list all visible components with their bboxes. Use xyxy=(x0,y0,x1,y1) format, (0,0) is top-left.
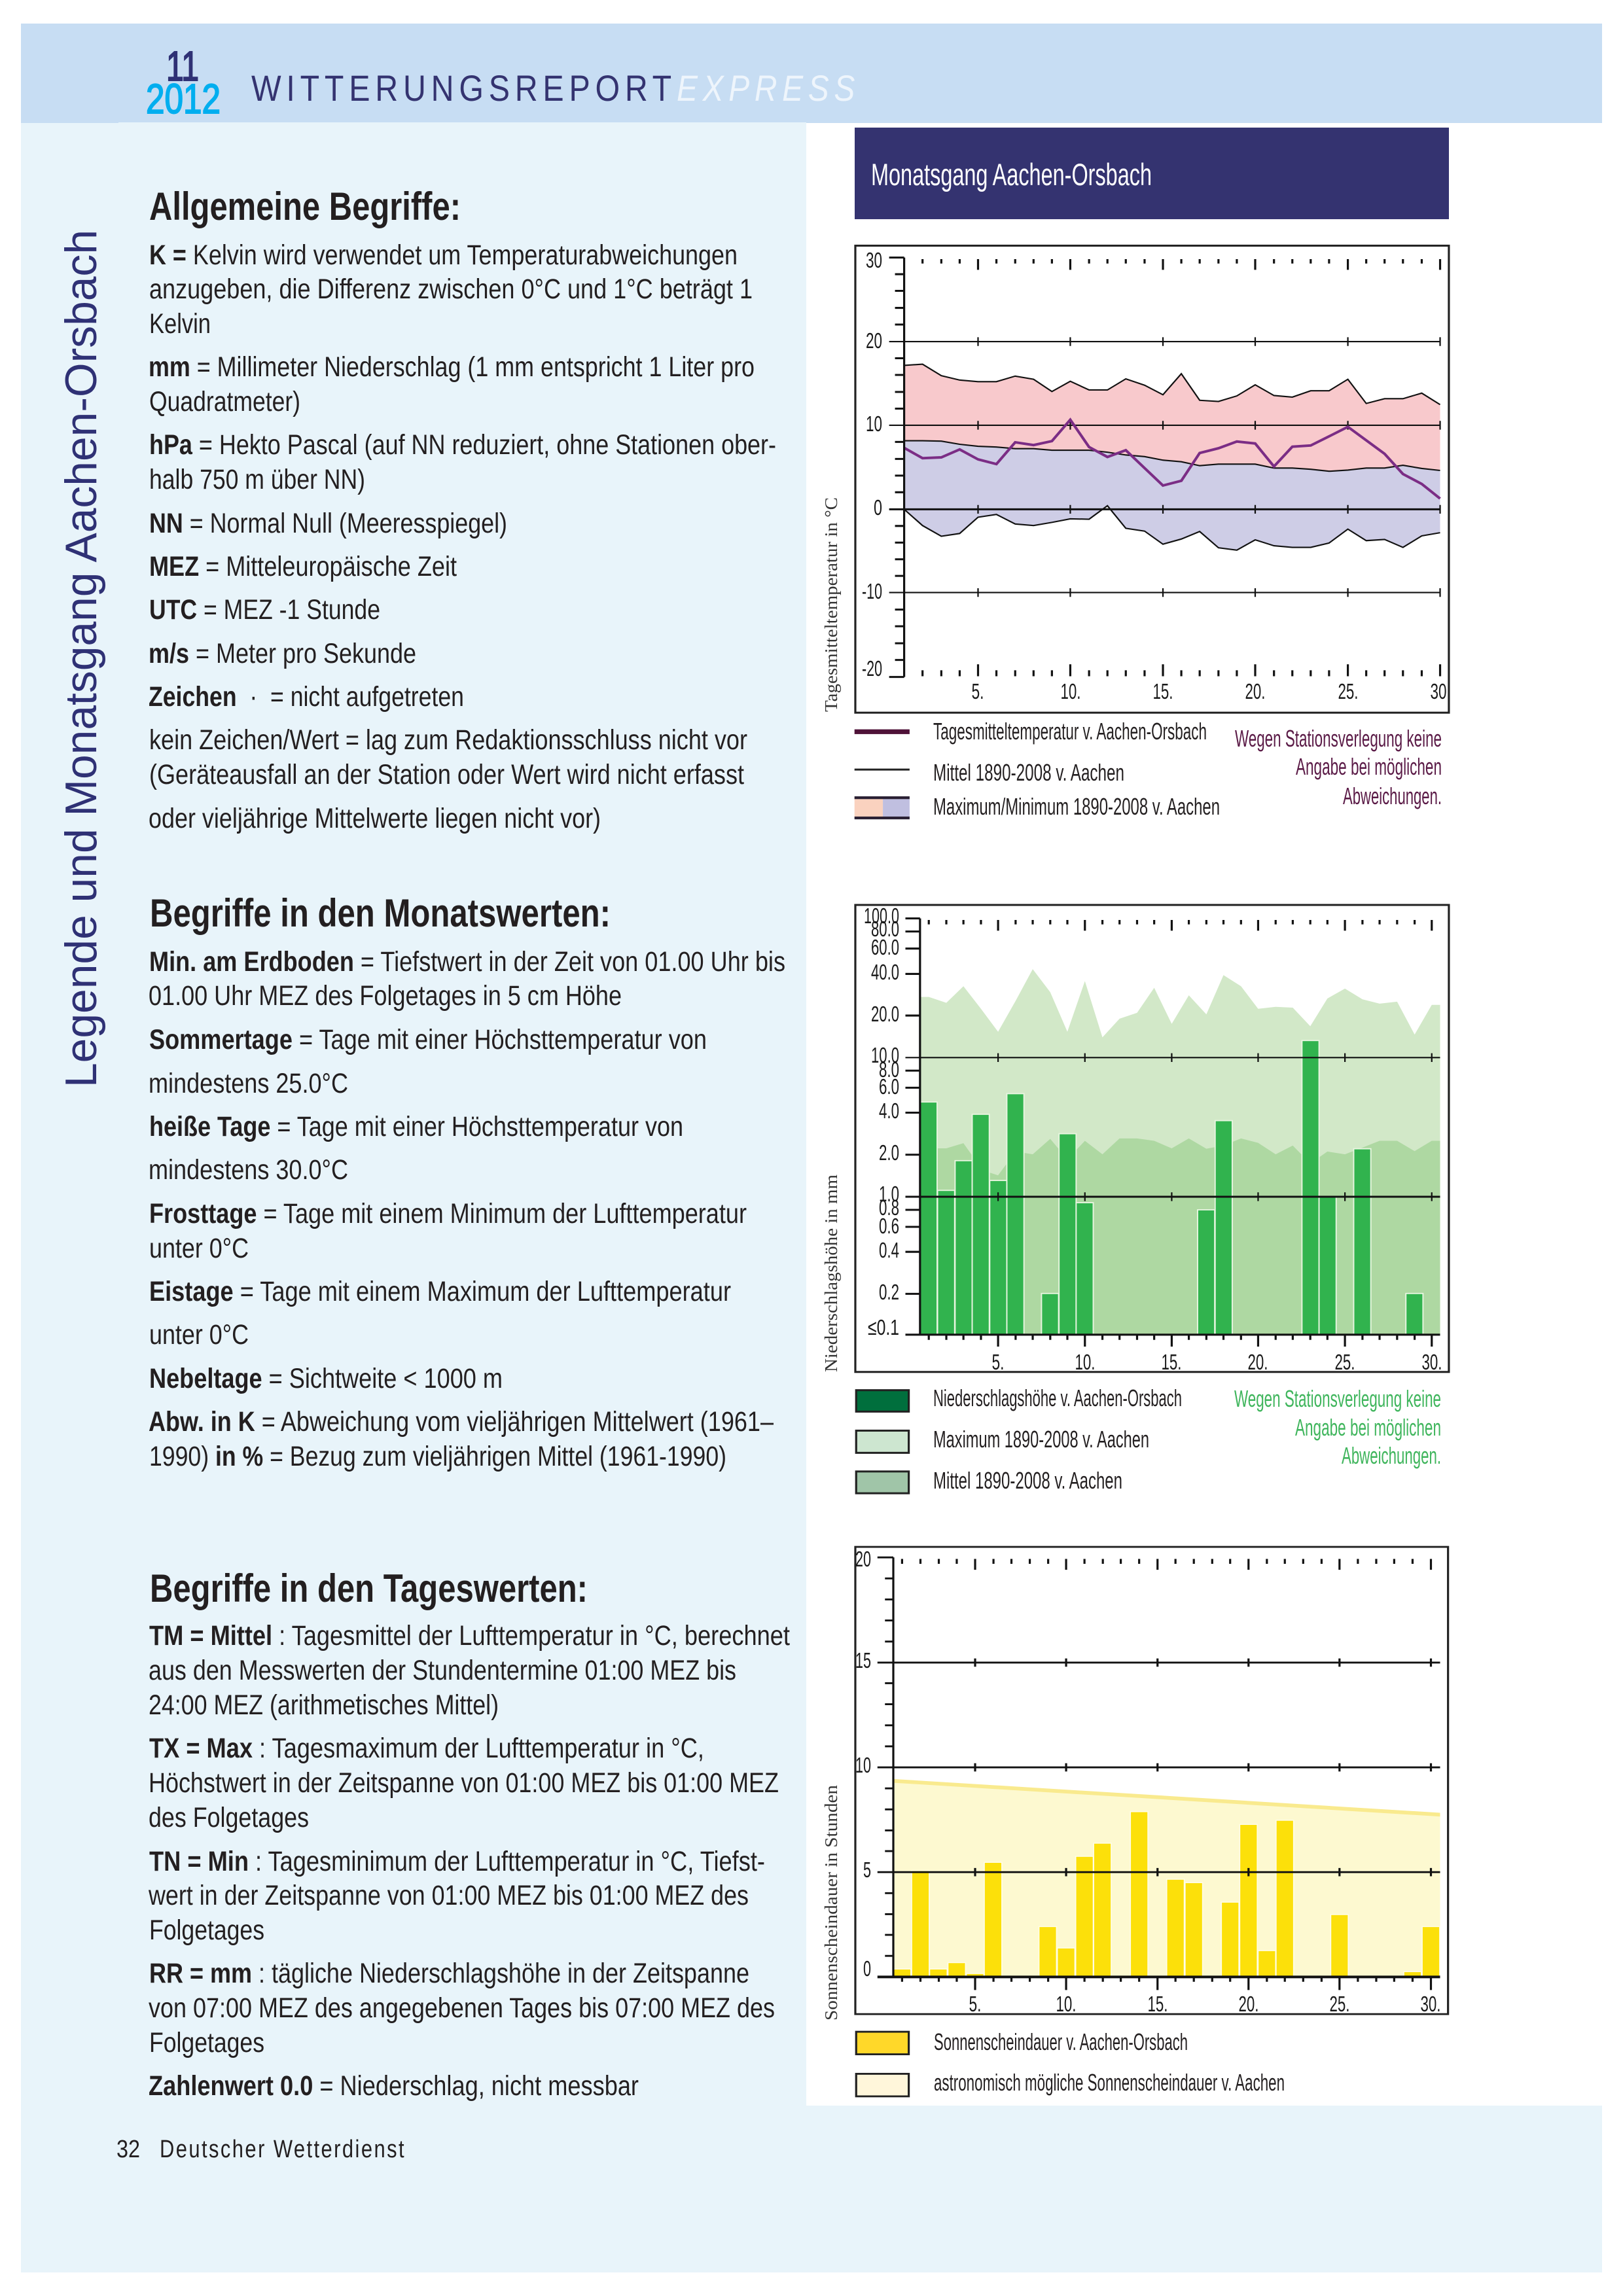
precipitation y-axis labels: 0.2 xyxy=(879,1280,899,1304)
definition Min. am Erdboden xyxy=(149,946,785,1012)
axes and ticks xyxy=(889,258,1440,677)
definition Frosttage xyxy=(149,1198,747,1264)
precipitation y-axis labels: 0.6 xyxy=(879,1214,899,1238)
temperature x-axis labels: 30 xyxy=(1431,679,1446,703)
sunshine axis title: Sonnenscheindauer in Stunden xyxy=(821,1784,841,2021)
definition Eistage xyxy=(149,1276,731,1351)
definition Nebeltage: Nebeltage = Sichtweite < 1000 m xyxy=(149,1363,503,1394)
definition heiße Tage: heiße Tage = Tage mit einer Höchsttemperatur von xyxy=(149,1111,683,1142)
temperature y-axis labels xyxy=(862,248,882,680)
sunshine plot shapes xyxy=(855,1547,1448,2096)
precipitation y-axis labels: 10.0 xyxy=(871,1043,899,1067)
precipitation y-axis labels: 1.0 xyxy=(879,1182,899,1206)
definition kein Zeichen xyxy=(149,724,747,834)
precipitation y-axis labels: 0.8 xyxy=(879,1195,899,1220)
definition Frosttage: Frosttage = Tage mit einem Minimum der Lufttemperatur xyxy=(149,1198,747,1229)
minimum line xyxy=(904,506,1440,550)
temperature x-axis labels: 20. xyxy=(1245,679,1266,703)
definition Eistage: unter 0°C xyxy=(149,1319,249,1351)
heading: Begriffe in den Monatswerten: xyxy=(150,891,611,935)
temperature note: Wegen Stationsverlegung keine xyxy=(1235,725,1442,752)
precipitation y-axis labels: ≤0.1 xyxy=(868,1315,899,1339)
definition Min. am Erdboden: 01.00 Uhr MEZ des Folgetages in 5 cm Höhe xyxy=(149,980,622,1012)
sunshine legend labels xyxy=(934,2028,1285,2096)
temperature legend labels: Mittel 1890-2008 v. Aachen xyxy=(933,759,1124,786)
precipitation x-axis labels xyxy=(992,1350,1442,1374)
definition Frosttage: unter 0°C xyxy=(149,1233,249,1264)
precipitation axis title: Niederschlagshöhe in mm xyxy=(821,1174,841,1372)
temperature y-axis labels: 0 xyxy=(874,495,882,520)
issue year: 2012 xyxy=(146,75,221,122)
right white chart panel xyxy=(806,123,1602,2106)
temperature x-axis labels xyxy=(971,679,1446,703)
temperature y-axis labels: 10 xyxy=(866,412,882,436)
precipitation y-axis labels: 0.4 xyxy=(879,1238,899,1262)
header title block xyxy=(146,43,860,122)
sunshine y-axis labels: 0 xyxy=(863,1956,871,1981)
sunshine x-axis labels: 25. xyxy=(1330,1992,1349,2016)
definition Min. am Erdboden: Min. am Erdboden = Tiefstwert in der Zeit von 01.00 Uhr bis xyxy=(149,946,785,978)
astronomically possible sunshine area xyxy=(893,1781,1440,1977)
definition Sommertage xyxy=(149,1024,707,1099)
definition RR xyxy=(149,1958,775,2058)
legend swatch: long-term mean xyxy=(855,769,910,771)
panel: sunshine chart xyxy=(821,1547,1448,2096)
sunshine y-axis labels: 20 xyxy=(855,1547,871,1571)
panel: temperature chart xyxy=(821,245,1449,820)
axes and ticks xyxy=(878,1557,1440,1990)
temperature note xyxy=(1235,725,1442,809)
definition Abw. in K: Abw. in K = Abweichung vom vieljährigen Mittelwert (1961– xyxy=(149,1406,774,1438)
precipitation x-axis labels: 5. xyxy=(992,1350,1004,1374)
definition m/s: m/s = Meter pro Sekunde xyxy=(149,638,416,669)
maximum area xyxy=(920,969,1440,1335)
band maximum to mean xyxy=(904,364,1440,471)
definition TX: des Folgetages xyxy=(149,1802,309,1833)
definition TN: wert in der Zeitspanne von 01:00 MEZ bis 01:00 MEZ des xyxy=(148,1880,749,1911)
definition TX xyxy=(149,1733,779,1833)
definition RR: Folgetages xyxy=(149,2027,264,2058)
sunshine x-axis labels xyxy=(969,1992,1441,2016)
precipitation y-axis labels: 4.0 xyxy=(879,1099,899,1123)
sunshine legend labels: Sonnenscheindauer v. Aachen-Orsbach xyxy=(934,2028,1188,2055)
mean line xyxy=(904,441,1440,471)
issue month: 11 xyxy=(166,43,199,90)
definition Abw. in K xyxy=(149,1406,774,1472)
report name: WITTERUNGSREPORT xyxy=(251,67,677,109)
precipitation y-axis labels: 8.0 xyxy=(879,1057,899,1082)
temperature y-axis labels: -20 xyxy=(862,656,882,680)
precipitation y-axis labels: 80.0 xyxy=(871,917,899,941)
definition TX: Höchstwert in der Zeitspanne von 01:00 MEZ bis 01:00 MEZ xyxy=(149,1767,779,1799)
definition TM: TM = Mittel : Tagesmittel der Lufttemperatur in °C, berechnet xyxy=(149,1620,790,1651)
precipitation y-axis labels: 60.0 xyxy=(871,935,899,959)
precipitation note: Angabe bei möglichen xyxy=(1295,1414,1441,1441)
definition TX: TX = Max : Tagesmaximum der Lufttemperatur in °C, xyxy=(149,1733,704,1764)
sunshine x-axis labels: 5. xyxy=(969,1992,982,2016)
band mean to minimum xyxy=(904,441,1440,550)
sunshine legend labels: astronomisch mögliche Sonnenscheindauer v. Aachen xyxy=(934,2069,1285,2096)
precipitation legend labels: Maximum 1890-2008 v. Aachen xyxy=(933,1426,1149,1453)
daily precipitation bars xyxy=(920,1040,1423,1335)
area upper edge xyxy=(893,1779,1440,1816)
precipitation y-axis labels: 40.0 xyxy=(871,960,899,984)
definition mm: Quadratmeter) xyxy=(149,386,300,417)
temperature x-axis labels: 10. xyxy=(1060,679,1081,703)
definition TN xyxy=(148,1846,765,1946)
precipitation note: Wegen Stationsverlegung keine xyxy=(1234,1385,1441,1412)
definition heiße Tage: mindestens 30.0°C xyxy=(149,1154,348,1186)
precipitation x-axis labels: 25. xyxy=(1335,1350,1355,1374)
sunshine x-axis labels: 15. xyxy=(1148,1992,1168,2016)
daily mean temperature line xyxy=(904,419,1440,499)
definition heiße Tage xyxy=(149,1111,683,1186)
definition RR: von 07:00 MEZ des angegebenen Tages bis 07:00 MEZ des xyxy=(149,1992,775,2024)
definition TM: aus den Messwerten der Stundentermine 01:00 MEZ bis xyxy=(149,1655,736,1686)
report name suffix: EXPRESS xyxy=(677,67,860,109)
precipitation x-axis labels: 30. xyxy=(1421,1350,1442,1374)
definition Eistage: Eistage = Tage mit einem Maximum der Lufttemperatur xyxy=(149,1276,731,1307)
precipitation y-axis labels: 6.0 xyxy=(879,1074,899,1099)
definition hPa xyxy=(149,429,776,495)
temperature legend labels: Tagesmitteltemperatur v. Aachen-Orsbach xyxy=(933,718,1207,745)
legend swatch: sunshine xyxy=(856,2032,909,2055)
definition K: K = Kelvin wird verwendet um Temperaturabweichungen xyxy=(149,239,738,271)
precipitation x-axis labels: 10. xyxy=(1075,1350,1096,1374)
definition RR: RR = mm : tägliche Niederschlagshöhe in der Zeitspanne xyxy=(149,1958,749,1989)
sunshine x-axis labels: 20. xyxy=(1238,1992,1259,2016)
section: Begriffe in den Monatswerten xyxy=(149,891,785,1472)
precipitation x-axis labels: 15. xyxy=(1161,1350,1182,1374)
mean area xyxy=(920,1139,1440,1335)
footer xyxy=(116,2136,406,2163)
definition TM xyxy=(149,1620,790,1721)
precipitation x-axis labels: 20. xyxy=(1247,1350,1268,1374)
legend swatch: daily mean xyxy=(855,730,910,734)
heading: Begriffe in den Tageswerten: xyxy=(150,1566,588,1610)
sunshine y-axis labels xyxy=(855,1547,871,1981)
precipitation note xyxy=(1234,1385,1441,1469)
legend swatch: precipitation xyxy=(856,1390,909,1411)
definition K: anzugeben, die Differenz zwischen 0°C und 1°C beträgt 1 xyxy=(149,274,753,305)
definition TM: 24:00 MEZ (arithmetisches Mittel) xyxy=(149,1689,499,1721)
sunshine x-axis labels: 30. xyxy=(1420,1992,1441,2016)
temperature y-axis labels: 20 xyxy=(866,328,882,353)
left text panel xyxy=(118,122,806,2106)
definition MEZ: MEZ = Mitteleuropäische Zeit xyxy=(149,551,457,582)
header band xyxy=(21,24,1602,123)
temperature plot shapes xyxy=(855,245,1449,819)
precipitation plot shapes xyxy=(855,905,1449,1493)
definition K: Kelvin xyxy=(149,308,211,340)
publisher: Deutscher Wetterdienst xyxy=(160,2136,406,2163)
legend swatch: maximum xyxy=(856,1430,909,1453)
temperature x-axis labels: 15. xyxy=(1153,679,1173,703)
definition Sommertage: mindestens 25.0°C xyxy=(149,1068,348,1099)
definition kein Zeichen: oder vieljährige Mittelwerte liegen nicht vor) xyxy=(149,803,601,834)
definition Sommertage: Sommertage = Tage mit einer Höchsttemperatur von xyxy=(149,1024,707,1055)
definition K xyxy=(149,239,753,340)
chart section title bar xyxy=(855,128,1449,219)
definition NN: NN = Normal Null (Meeresspiegel) xyxy=(149,508,507,539)
legend swatch: possible sunshine xyxy=(856,2074,909,2096)
definition mm: mm = Millimeter Niederschlag (1 mm entspricht 1 Liter pro xyxy=(149,351,755,383)
panel: precipitation chart xyxy=(821,904,1449,1494)
precipitation legend labels xyxy=(933,1385,1182,1494)
temperature legend labels xyxy=(933,718,1220,820)
definition hPa: hPa = Hekto Pascal (auf NN reduziert, ohne Stationen ober- xyxy=(149,429,776,461)
definition mm xyxy=(149,351,755,417)
axes and ticks xyxy=(906,1053,1440,1201)
daily sunshine bars xyxy=(893,1812,1440,1977)
definition kein Zeichen: (Geräteausfall an der Station oder Wert wird nicht erfasst xyxy=(149,759,744,790)
chart section title bar: Monatsgang Aachen-Orsbach xyxy=(871,157,1152,192)
legend swatch: maximum and minimum xyxy=(855,796,910,819)
precipitation y-axis labels: 2.0 xyxy=(879,1140,899,1165)
heading: Allgemeine Begriffe: xyxy=(149,185,461,228)
section: Begriffe in den Tageswerten xyxy=(148,1566,790,2102)
temperature note: Angabe bei möglichen xyxy=(1296,753,1442,780)
definition Abw. in K: 1990) in % = Bezug zum vieljährigen Mittel (1961-1990) xyxy=(149,1441,726,1472)
precipitation legend labels: Mittel 1890-2008 v. Aachen xyxy=(933,1467,1122,1494)
section: Allgemeine Begriffe xyxy=(149,185,776,834)
definition hPa: halb 750 m über NN) xyxy=(149,464,365,495)
temperature legend labels: Maximum/Minimum 1890-2008 v. Aachen xyxy=(933,793,1220,820)
definition TN: TN = Min : Tagesminimum der Lufttemperatur in °C, Tiefst- xyxy=(149,1846,765,1877)
page number: 32 xyxy=(116,2136,140,2163)
sunshine y-axis labels: 15 xyxy=(855,1648,871,1672)
temperature x-axis labels: 5. xyxy=(971,679,984,703)
temperature x-axis labels: 25. xyxy=(1338,679,1359,703)
definition TN: Folgetages xyxy=(149,1915,264,1946)
definition UTC: UTC = MEZ -1 Stunde xyxy=(149,594,380,626)
temperature y-axis labels: -10 xyxy=(862,579,882,603)
definition kein Zeichen: kein Zeichen/Wert = lag zum Redaktionsschluss nicht vor xyxy=(149,724,747,756)
precipitation y-axis labels: 100.0 xyxy=(864,904,899,928)
precipitation legend labels: Niederschlagshöhe v. Aachen-Orsbach xyxy=(933,1385,1182,1411)
sunshine y-axis labels: 10 xyxy=(855,1753,871,1777)
temperature note: Abweichungen. xyxy=(1343,783,1442,809)
maximum line xyxy=(904,364,1440,404)
precipitation y-axis labels xyxy=(864,904,899,1339)
definition Zeichen: Zeichen · = nicht aufgetreten xyxy=(149,681,464,713)
sunshine x-axis labels: 10. xyxy=(1056,1992,1076,2016)
vertical page title: Legende und Monatsgang Aachen-Orsbach xyxy=(56,230,106,1087)
precipitation note: Abweichungen. xyxy=(1342,1442,1441,1469)
definition Zahlenwert: Zahlenwert 0.0 = Niederschlag, nicht messbar xyxy=(149,2070,639,2102)
temperature axis title: Tagesmitteltemperatur in °C xyxy=(821,497,841,712)
temperature y-axis labels: 30 xyxy=(866,248,882,272)
sunshine y-axis labels: 5 xyxy=(863,1858,871,1882)
precipitation y-axis labels: 20.0 xyxy=(871,1002,899,1026)
legend swatch: mean xyxy=(856,1472,909,1493)
